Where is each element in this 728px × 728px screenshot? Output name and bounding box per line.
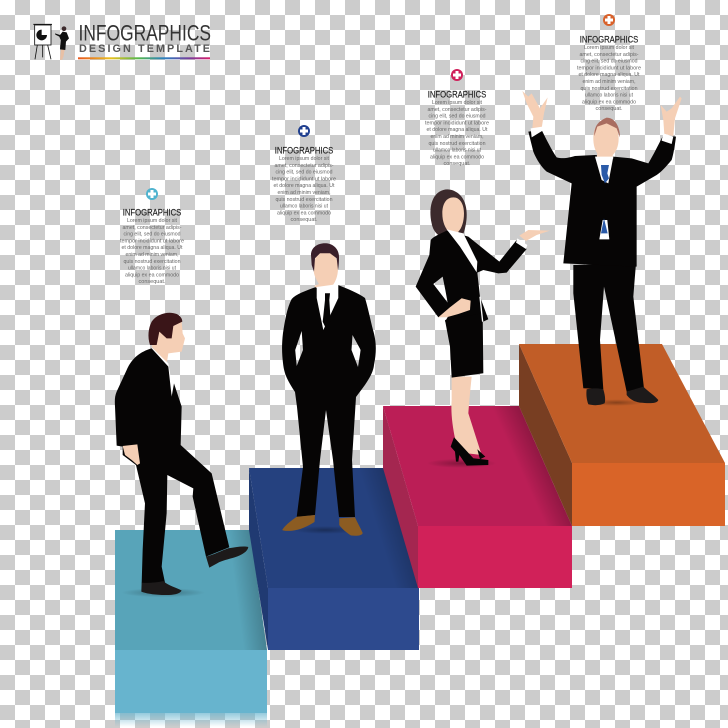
body text: enim ad minim veniam, [126,252,179,258]
body text: enim ad minim veniam, [430,134,484,140]
panel: text block 1 [120,188,184,285]
body text [577,45,641,112]
hair [148,313,182,345]
jacket [416,231,527,322]
face [442,197,464,238]
panel: text block 3 [425,69,489,167]
body text: aliquip ex ea commodo [125,272,179,278]
body text: et dolore magna aliqua. Ut [578,72,640,78]
cuff [516,238,527,249]
icon: presentation easel [33,24,52,59]
body text: quis nostrud exercitation [580,86,638,92]
body text: Lorem ipsum dolor sit [127,218,177,224]
left shoe [586,388,605,405]
body text: aliquip ex ea commodo [430,154,484,160]
neck and face [314,252,338,295]
lower shirt [599,220,609,239]
body text: aliquip ex ea commodo [277,210,331,216]
figure: man stepping up [115,313,248,597]
logo title: INFOGRAPHICS [78,21,211,46]
heels [451,437,488,466]
hair [311,243,339,272]
jacket strap [480,297,483,322]
left shoe [282,515,315,531]
shirt [317,284,338,330]
rainbow rule [78,57,210,59]
body text: enim ad minim veniam, [582,79,636,85]
body text: ullamco laboris nisi ut [585,93,633,99]
skirt [445,313,483,378]
icon: orange plus [603,14,615,26]
icon: teal plus [146,188,158,200]
suit [115,348,229,583]
body text: amet, consectetur adipis- [122,225,182,231]
hair [430,189,467,239]
body text: amet, consectetur adipis- [428,107,487,113]
jacket [528,130,676,267]
body text [425,100,489,167]
body text: quis nostrud exercitation [124,259,180,265]
body text [272,156,336,223]
body text: consequat. [138,279,166,285]
icon: presenter woman [55,26,69,60]
body text: tempor incididunt ut labore [577,65,641,71]
hair [594,118,620,137]
body text: cing elit, sed do eiusmod [124,232,180,238]
panel: text block 4 [577,14,641,112]
body text: et dolore magna aliqua. Ut [426,127,488,133]
body text: aliquip ex ea commodo [582,99,636,105]
heading: INFOGRAPHICS [123,208,181,218]
left cuff [531,127,543,137]
body text: Lorem ipsum dolor sit [584,45,634,51]
trousers [573,263,644,392]
right shoe [339,517,363,536]
heading: INFOGRAPHICS [428,90,486,100]
body text: tempor incididunt ut labore [425,120,489,126]
icon: navy plus [298,125,310,137]
left hand [522,91,548,129]
rear shoe [141,581,182,595]
body text: ullamco laboris nisi ut [280,204,328,210]
blouse [447,229,477,272]
body text: quis nostrud exercitation [276,197,332,203]
body text: Lorem ipsum dolor sit [432,100,482,106]
step 3: magenta [383,406,572,588]
body text: enim ad minim veniam, [278,190,331,196]
body text: et dolore magna aliqua. Ut [122,245,183,251]
body text: cing elit, sed do eiusmod [276,170,332,176]
suit [282,285,376,517]
body text: amet, consectetur adipis- [274,163,334,169]
right shoe [627,387,658,403]
heading: INFOGRAPHICS [580,34,638,44]
icon: magenta plus [451,69,463,81]
body text: et dolore magna aliqua. Ut [274,183,335,189]
right hand [661,97,682,136]
forward hand [519,230,550,241]
body text: tempor incididunt ut labore [120,238,184,244]
panel: text block 2 [272,125,336,223]
hand [123,444,140,465]
right cuff [662,133,673,144]
figure: man with hands in pockets [282,243,376,536]
body text: consequat. [444,161,471,167]
body text: Lorem ipsum dolor sit [279,156,329,162]
logo subtitle: DESIGN TEMPLATE [79,43,210,55]
tie [323,293,331,330]
step 1: teal [115,530,267,727]
tie [601,165,609,183]
figure: woman presenting [416,189,550,468]
body text: tempor incididunt ut labore [272,176,336,182]
body text: cing elit, sed do eiusmod [428,114,486,120]
body text: cing elit, sed do eiusmod [580,59,638,65]
hip hand [438,298,471,317]
skin: head and neck [152,322,185,364]
body text [120,218,184,285]
body text: ullamco laboris nisi ut [433,148,481,154]
raised shoe [206,546,248,568]
body text: consequat. [596,106,623,112]
head and neck [593,122,619,163]
legs [451,377,482,455]
body text: consequat. [290,217,318,223]
logo header [33,21,211,60]
heading: INFOGRAPHICS [275,146,333,156]
step 4: orange [519,344,725,526]
shirt collar [595,157,613,183]
figure: man with raised arms [522,91,682,406]
body text: ullamco laboris nisi ut [128,266,176,272]
body text: quis nostrud exercitation [428,141,486,147]
step 2: blue [249,468,419,650]
lower tie [601,218,608,233]
shirt [152,347,174,397]
body text: amet, consectetur adipis- [580,52,639,58]
